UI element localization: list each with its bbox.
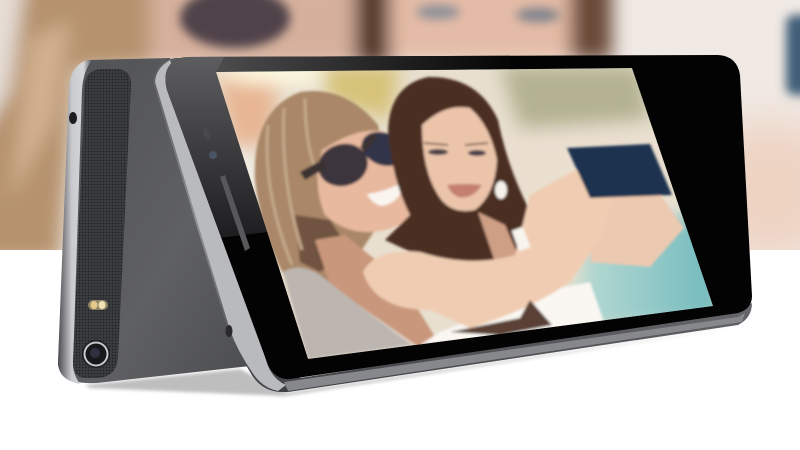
hair streaks <box>267 98 320 265</box>
rear body <box>58 58 250 383</box>
front camera <box>209 151 217 159</box>
side button <box>69 112 77 124</box>
bottom rim highlight <box>284 313 745 391</box>
side button front <box>226 325 232 337</box>
left woman hair <box>253 90 380 282</box>
floor shadow <box>85 326 745 396</box>
second arm <box>590 195 684 267</box>
earpiece sensor <box>202 127 211 140</box>
wrist band <box>512 227 530 251</box>
left smile <box>367 182 403 206</box>
hair shadow <box>294 214 340 272</box>
right woman face <box>422 107 497 211</box>
blurred background photo band <box>0 0 800 260</box>
phone rear view <box>58 58 250 384</box>
speaker grille <box>73 69 131 378</box>
earring <box>495 181 507 199</box>
screen photo <box>216 60 720 359</box>
side rim and bottom edge <box>153 58 752 392</box>
lower hair <box>450 300 552 335</box>
black front glass <box>165 55 752 379</box>
lower slot <box>220 175 250 251</box>
left metal rim <box>58 60 92 384</box>
right woman hair <box>385 77 532 268</box>
arm and hand <box>363 170 615 328</box>
left rim highlight <box>155 60 286 391</box>
glass sheen <box>160 55 510 238</box>
right woman neck <box>478 212 518 262</box>
dual LED flash <box>88 300 108 310</box>
blurred hand at right <box>742 108 800 250</box>
left woman face <box>318 130 413 232</box>
rear camera <box>82 340 110 368</box>
white top <box>420 282 604 345</box>
left woman chest <box>315 235 440 348</box>
phone front view <box>153 55 752 392</box>
left sweater <box>283 268 412 359</box>
lips <box>447 184 482 198</box>
held phone <box>567 144 672 198</box>
sunglasses <box>299 130 395 188</box>
eyes <box>424 143 488 156</box>
